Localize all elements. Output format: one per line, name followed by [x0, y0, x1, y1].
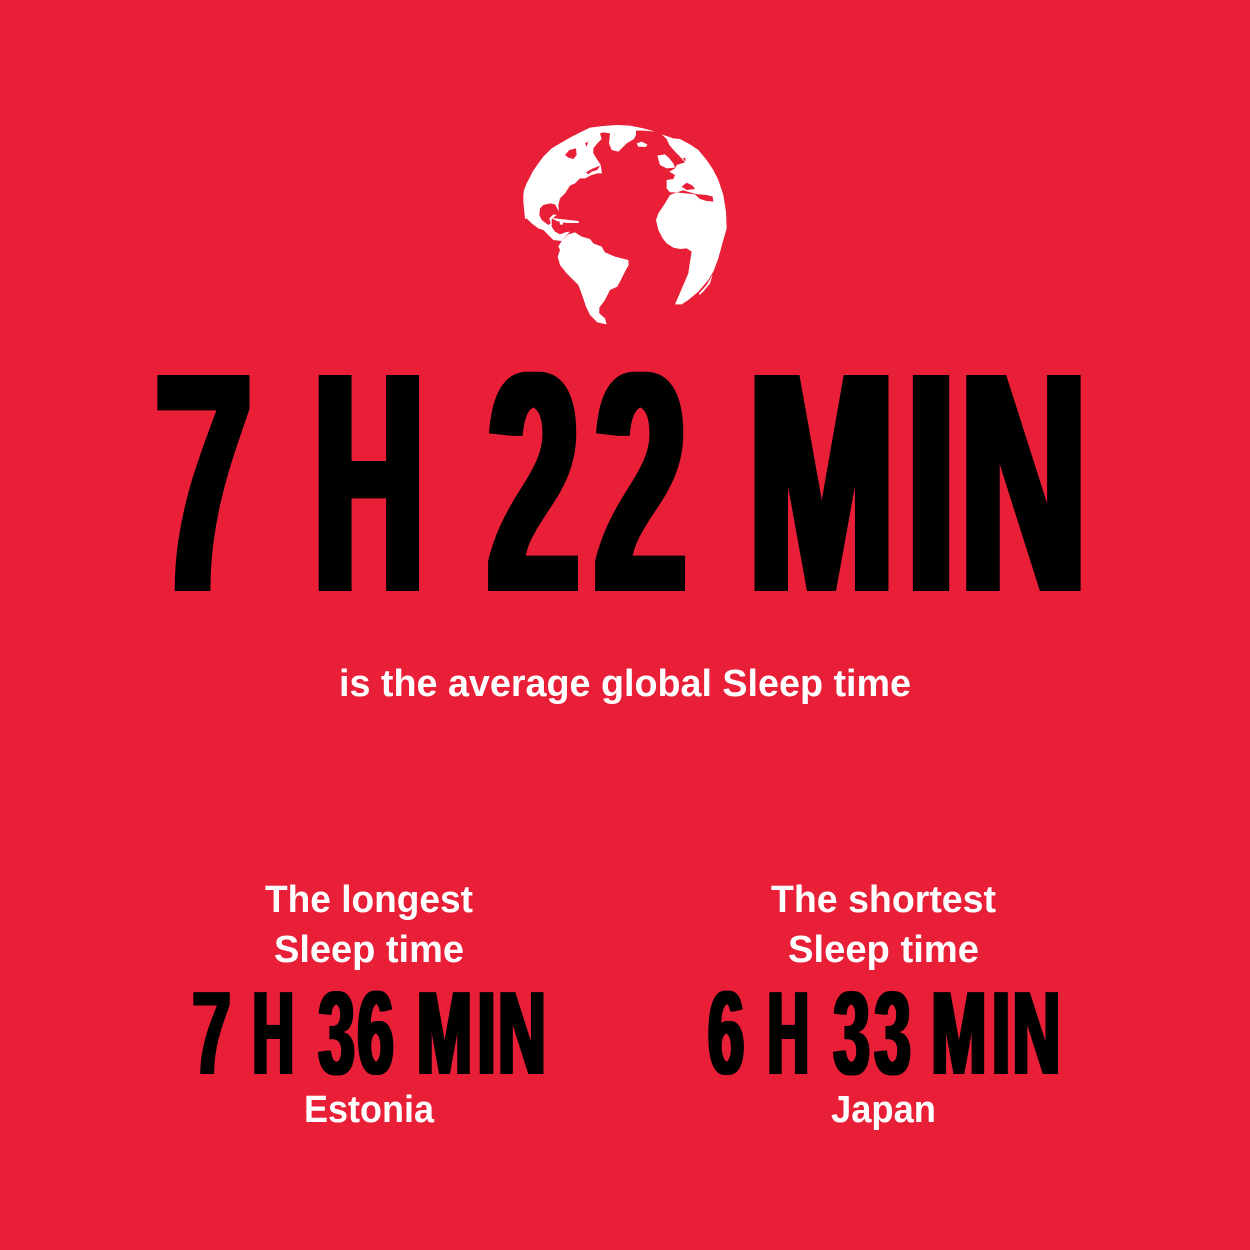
value: 7 H 36 MIN: [192, 966, 546, 1100]
headline: 7 H 22 MIN: 7: [156, 307, 252, 658]
value: 6 H 33 MIN: MIN: [931, 968, 1061, 1100]
heading: sleep time: Sleep time: [274, 929, 464, 971]
headline: 7 H 22 MIN: H: [314, 308, 424, 658]
country: Japan: Japan: [831, 1089, 936, 1131]
heading: the longest: The longest: [265, 879, 473, 921]
subtitle: is the average global Sleep time: [339, 663, 911, 705]
heading: the shortest: The shortest: [771, 879, 996, 921]
value: 6 H 33 MIN: 33: [833, 967, 911, 1100]
value: 6 H 33 MIN: [708, 966, 1061, 1100]
headline: 7 H 22 MIN: 22: [488, 308, 686, 659]
country: Estonia: Estonia: [304, 1089, 435, 1131]
panel: longest sleep time: [192, 879, 546, 1131]
headline: 7 H 22 MIN: [156, 307, 1087, 659]
value: 7 H 36 MIN: 7: [192, 966, 231, 1100]
heading: sleep time: Sleep time: [788, 929, 979, 971]
panel: shortest sleep time: [708, 879, 1061, 1131]
icon: globe: [523, 125, 727, 324]
value: 6 H 33 MIN: H: [768, 966, 809, 1099]
value: 6 H 33 MIN: 6: [708, 967, 744, 1100]
value: 7 H 36 MIN: H: [252, 966, 294, 1099]
headline: 7 H 22 MIN: MIN: [748, 307, 1087, 658]
value: 7 H 36 MIN: MIN: [417, 968, 546, 1100]
value: 7 H 36 MIN: 36: [318, 967, 394, 1100]
